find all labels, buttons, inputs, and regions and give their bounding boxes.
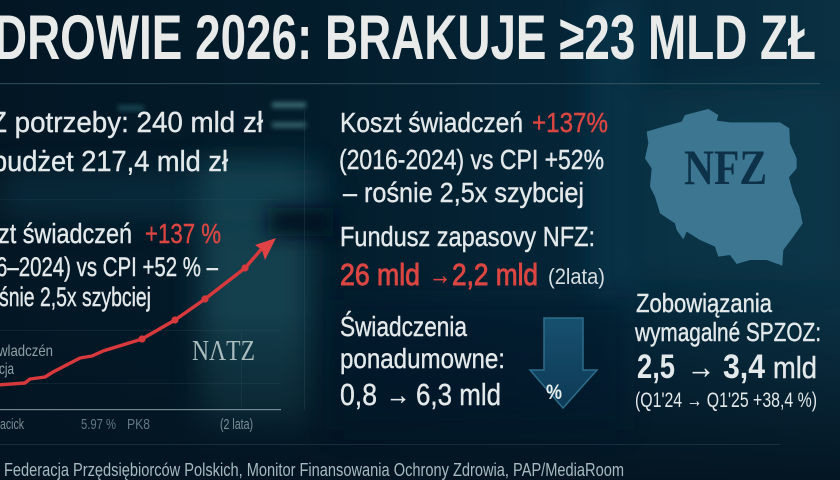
text block: reserve fund: Fundusz zapasovy NFZ: (340, 221, 595, 252)
text block: over-contract services (340, 310, 505, 412)
trend arrowhead (255, 238, 276, 260)
heading rule (0, 83, 820, 84)
text block: over-contract services: → (386, 380, 410, 410)
text block: SPZOZ liabilities: 3,4 (723, 348, 765, 386)
text block: centre cost of benefits: – rośnie 2,5x szybciej (343, 177, 584, 208)
text block: SPZOZ liabilities (634, 288, 821, 412)
text block: left cost of benefits: +137 % (145, 218, 221, 249)
text block: reserve fund (340, 221, 605, 292)
text block: over-contract services: 0,8 (340, 377, 377, 412)
footer rule (0, 444, 780, 445)
chart axis (0, 409, 281, 410)
text block: SPZOZ liabilities: → (687, 349, 715, 385)
data points (138, 264, 249, 343)
chart axis labels: PK8 (127, 416, 150, 433)
line chart: rising costs (0, 238, 281, 433)
text block: reserve fund: (2lata) (548, 264, 605, 289)
text block: SPZOZ liabilities: mld (773, 350, 817, 385)
chart series labels (0, 343, 53, 378)
text block: reserve fund: 26 mld (340, 257, 420, 292)
text block: over-contract services: ponadumowne: (340, 343, 505, 374)
text block: left cost of benefits: zt świadczeń (0, 218, 132, 249)
text block: budget gap (0, 107, 264, 178)
chart watermark: NΛTZ (192, 335, 255, 367)
chart axis labels: (2 lata) (220, 416, 253, 433)
chart axis labels: acick (0, 416, 24, 433)
text block: centre cost of benefits (339, 107, 608, 208)
text block: left cost of benefits: śnie 2,5x szybciej (0, 282, 151, 312)
chart axis labels (0, 416, 253, 433)
red trend line (0, 245, 265, 385)
text block: over-contract services: Świadczenia (340, 310, 467, 342)
source line: Federacja Przędsiębiorców Polskich, Monitor Finansowania Ochrony Zdrowia, PAP/MediaRoom (4, 460, 624, 480)
text block: over-contract services: 6,3 mld (416, 377, 501, 412)
text block: reserve fund: → (429, 260, 451, 290)
icon: down arrow with percent: % (546, 381, 562, 404)
text block: left cost of benefits: 6–2024) vs CPI +52 % – (0, 252, 218, 282)
text block: SPZOZ liabilities: Zobowiązania (636, 288, 772, 318)
text block: left cost of benefits (0, 218, 221, 312)
text block: centre cost of benefits: +137% (532, 107, 608, 138)
text block: centre cost of benefits: (2016-2024) vs CPI +52% (339, 144, 604, 175)
chart series labels: wladczén (0, 343, 53, 360)
text block: reserve fund: 2,2 mld (452, 257, 538, 292)
text block: centre cost of benefits: Koszt świadczeń (340, 107, 523, 138)
chart axis labels: 5.97 % (81, 416, 116, 433)
icon: Poland map with NFZ: NFZ (684, 139, 767, 195)
icon: Poland map with NFZ (645, 109, 803, 266)
icon: down arrow with percent (530, 318, 597, 408)
text block: SPZOZ liabilities: 2,5 (637, 348, 675, 386)
